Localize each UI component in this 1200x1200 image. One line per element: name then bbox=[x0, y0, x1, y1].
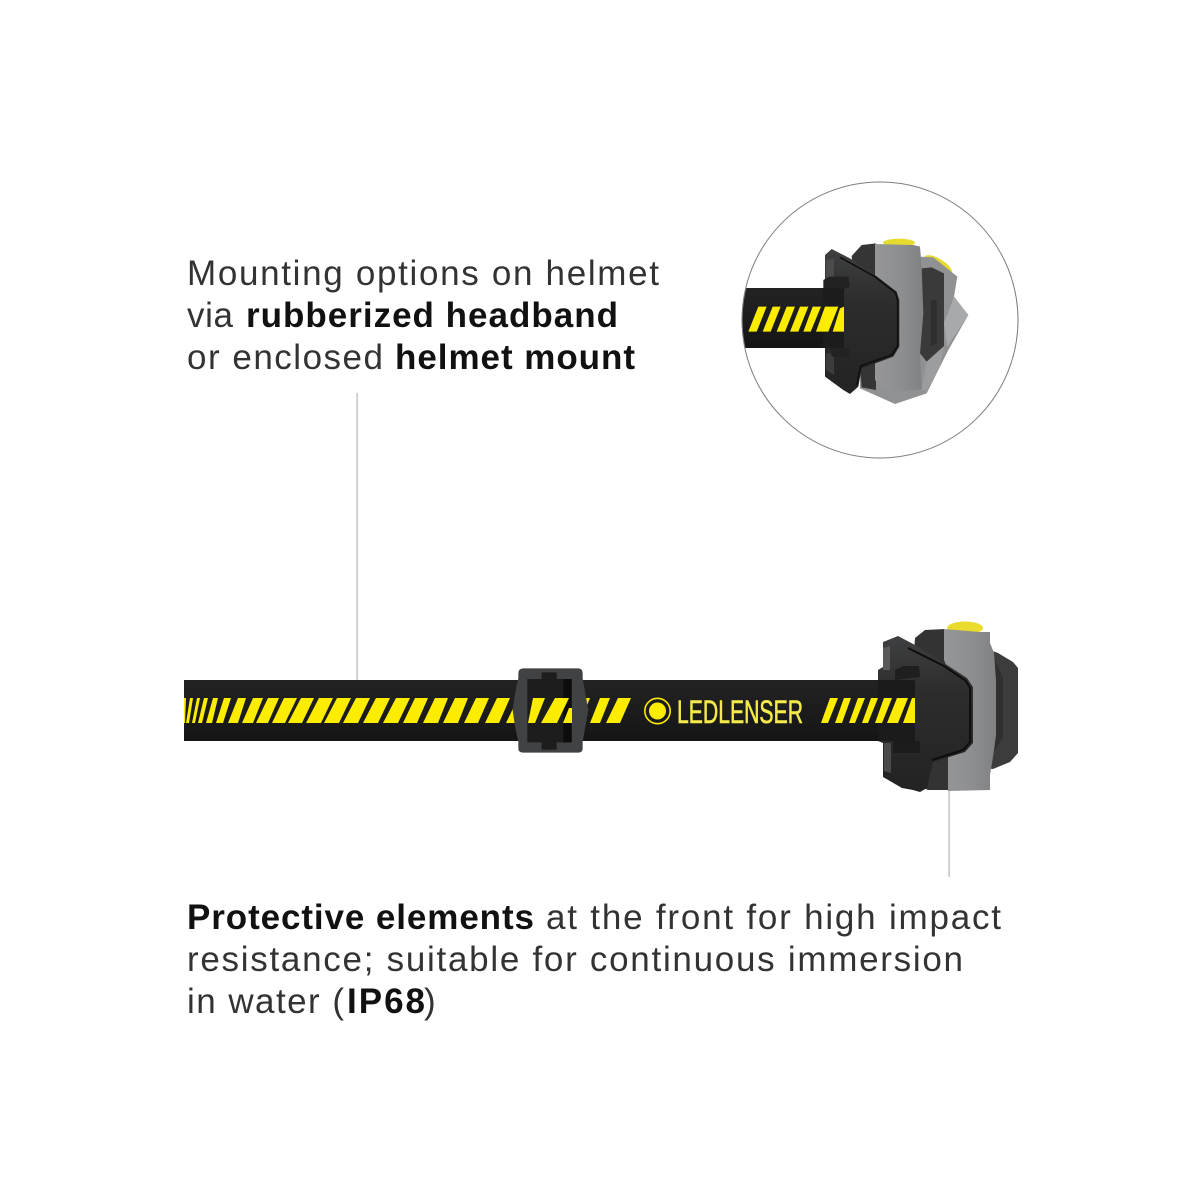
strap end bbox=[878, 680, 915, 741]
text block: protective elements: in water ( bbox=[187, 982, 344, 1021]
inset cover bbox=[823, 249, 899, 394]
clip tab top bbox=[895, 666, 920, 680]
rear housing bbox=[985, 650, 1018, 769]
inset band bbox=[742, 288, 825, 348]
dark body bbox=[905, 629, 950, 790]
buckle bbox=[513, 668, 588, 753]
text block: protective elements bbox=[187, 898, 1001, 1021]
text block: protective elements: at the front for high impact bbox=[546, 898, 1001, 937]
logo: ledlenser bbox=[645, 694, 803, 730]
black cover bbox=[878, 636, 973, 792]
text block: mounting options bbox=[187, 254, 659, 377]
inset rear panel bbox=[920, 267, 944, 362]
leader line: to headband bbox=[356, 393, 358, 681]
text block: mounting options: via bbox=[187, 296, 234, 335]
clip tab bottom bbox=[893, 741, 920, 753]
text block: mounting options: helmet mount bbox=[395, 338, 635, 377]
headband bbox=[184, 680, 915, 741]
headlamp: main view bbox=[875, 622, 1018, 792]
text block: protective elements: resistance; suitable for continuous immersion bbox=[187, 940, 963, 979]
strap end stripes bbox=[875, 698, 915, 723]
text block: protective elements: IP68 bbox=[347, 982, 425, 1021]
yellow button bbox=[947, 622, 983, 634]
gray housing bbox=[944, 629, 996, 791]
inset circle: helmet mount detail bbox=[742, 182, 1018, 458]
leader line: to front protection bbox=[948, 791, 950, 877]
text block: mounting options: Mounting options on helmet bbox=[187, 254, 659, 293]
yellow button bbox=[882, 238, 916, 245]
text block: mounting options: or enclosed bbox=[187, 338, 383, 377]
logo: ledlenser: LEDLENSER bbox=[677, 694, 803, 730]
headband stripes bbox=[184, 698, 878, 723]
text block: mounting options: rubberized headband bbox=[246, 296, 618, 335]
text block: protective elements: ) bbox=[424, 982, 436, 1021]
inset body bbox=[852, 243, 923, 392]
inset headlamp bbox=[816, 239, 968, 404]
inset lens bbox=[860, 251, 968, 404]
text block: protective elements: Protective elements bbox=[187, 898, 534, 937]
